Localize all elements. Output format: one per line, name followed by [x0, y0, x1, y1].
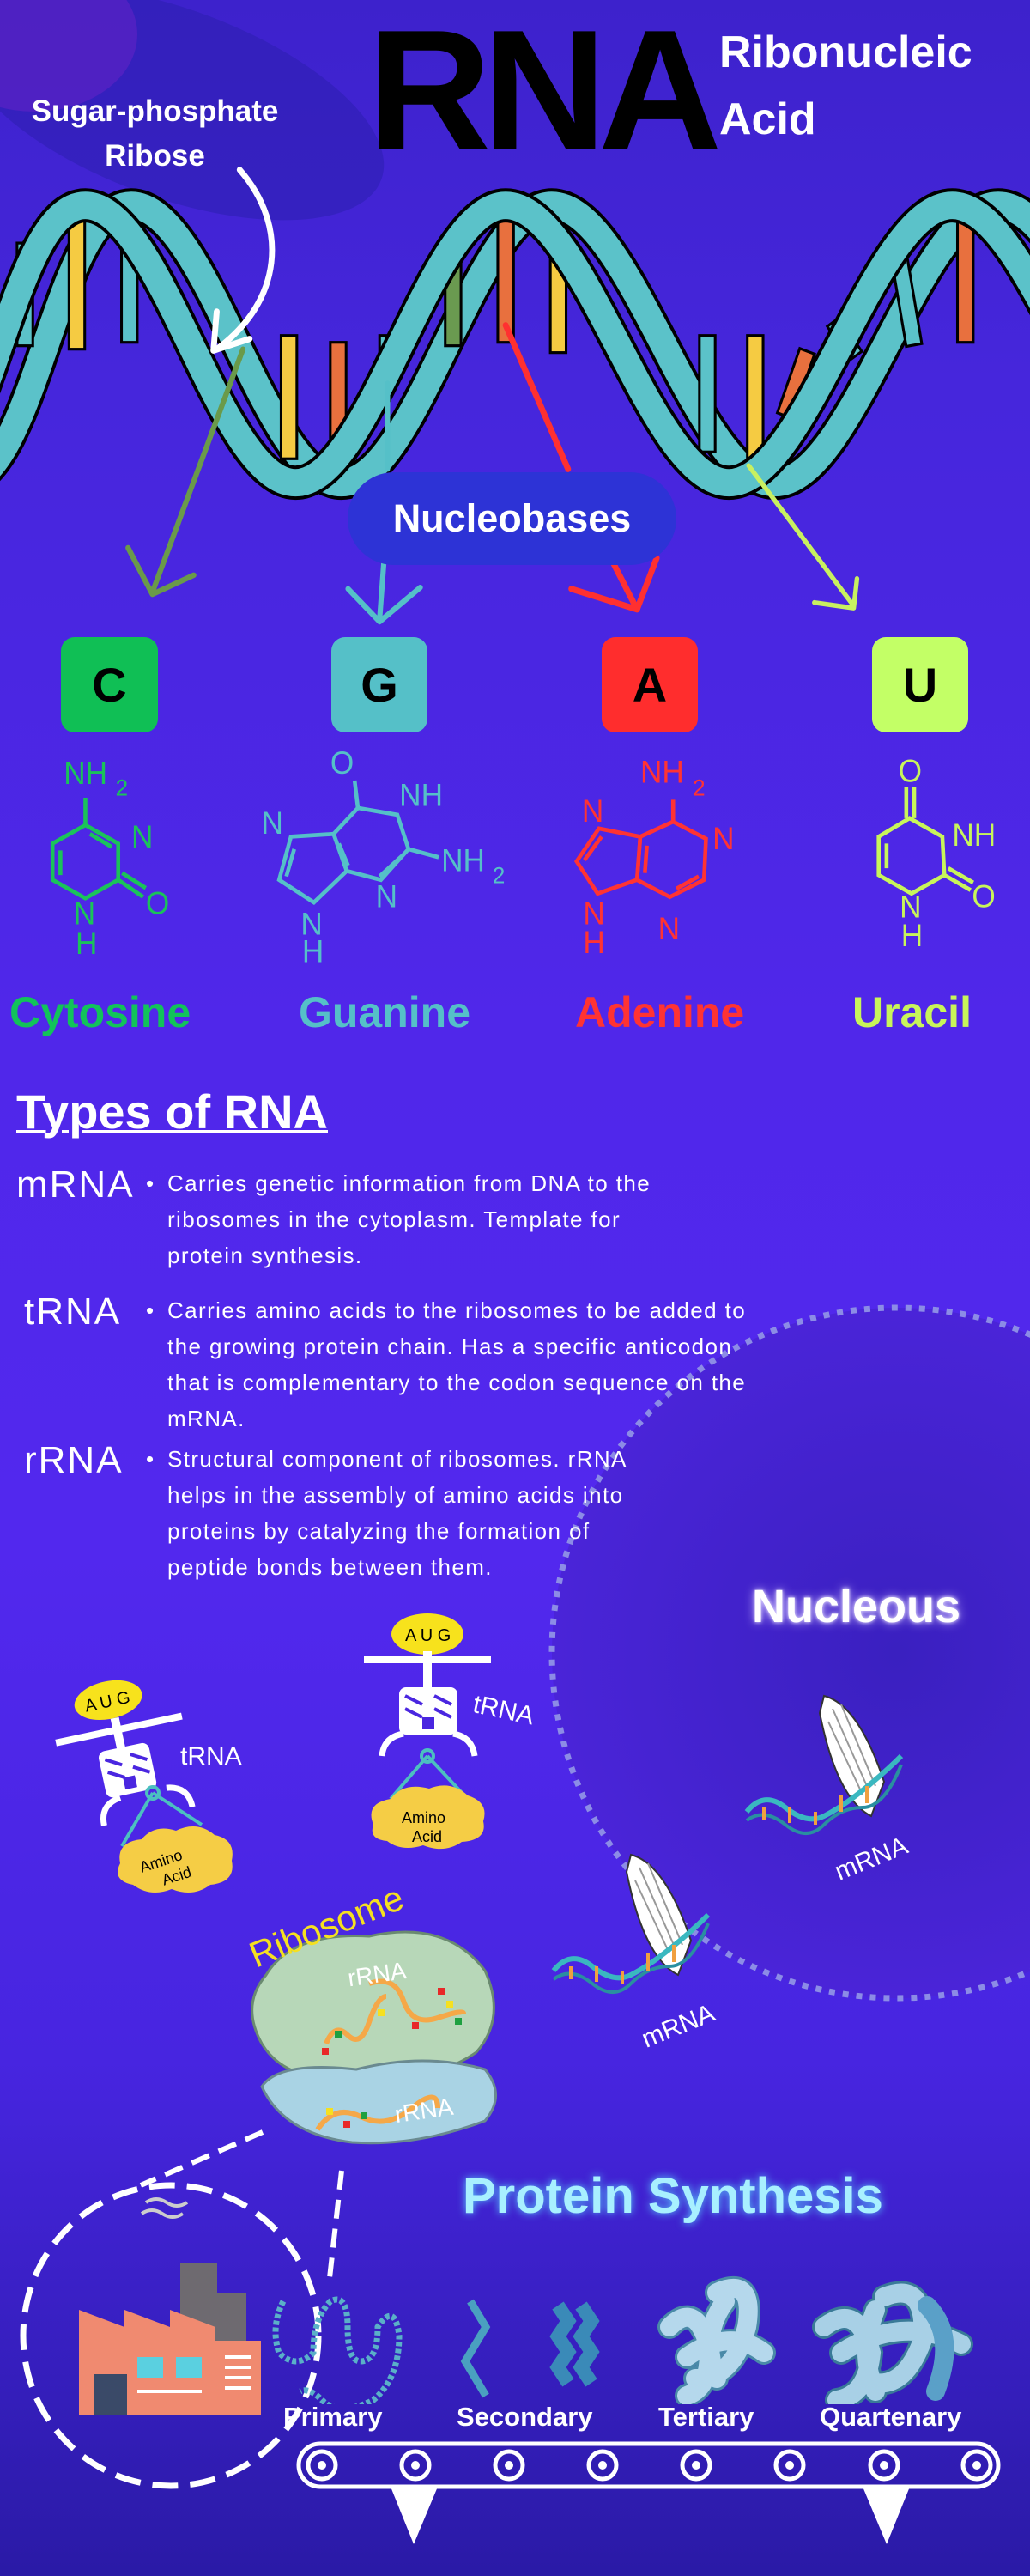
- block: tRNA: the growing protein chain. Has a specific anticodon: [167, 1334, 732, 1359]
- base names: [9, 988, 972, 1036]
- arrow: white sugar-phosphate: [214, 170, 272, 350]
- icon: tRNA helicopter 1: Acid: [160, 1863, 194, 1889]
- primary: [276, 2300, 399, 2409]
- factory callout: [21, 2129, 344, 2488]
- icon: tRNA helicopter 1: [55, 1680, 242, 1893]
- structure: guanine: 2: [493, 862, 505, 889]
- title: RNA: RNA: [367, 0, 713, 186]
- subtitle: Ribonucleic Acid: [719, 27, 972, 144]
- block: rRNA: proteins by catalyzing the formation of: [167, 1518, 591, 1544]
- back strand: [0, 205, 1030, 483]
- block: rRNA: rRNA: [24, 1439, 124, 1481]
- structure: adenine: N: [658, 910, 680, 946]
- icon: factory: [79, 2199, 261, 2415]
- block: tRNA: mRNA.: [167, 1406, 245, 1431]
- secondary helix: [465, 2301, 486, 2396]
- structure: guanine: N: [300, 906, 323, 942]
- structure: adenine: N: [712, 820, 735, 856]
- block: rRNA: helps in the assembly of amino acids into: [167, 1482, 623, 1508]
- structure: adenine: H: [583, 924, 605, 960]
- icon: mRNA with wings 2: [551, 1853, 718, 2054]
- background blob top-left: [0, 0, 384, 220]
- structure: cytosine: N: [131, 819, 153, 854]
- subtitle: Ribonucleic Acid: Ribonucleic: [719, 27, 972, 77]
- structure: adenine: N: [583, 896, 605, 932]
- label: Primary: Primary: [283, 2402, 382, 2432]
- arrow: yellow-green uracil: [748, 465, 857, 608]
- name: Adenine: Adenine: [575, 988, 744, 1036]
- structure: guanine: O: [330, 744, 354, 781]
- structure: uracil: H: [901, 917, 923, 953]
- box: C: [61, 637, 158, 732]
- icon: mRNA with wings 1: [745, 1695, 912, 1886]
- structure: cytosine: 2: [116, 775, 128, 801]
- icon: tRNA helicopter 1: A U G: [83, 1688, 132, 1716]
- box: U: [872, 637, 968, 732]
- label: Nucleous: Nucleous: [752, 1581, 960, 1632]
- box: G: [331, 637, 427, 732]
- name: Uracil: Uracil: [852, 988, 972, 1036]
- icon: tRNA helicopter 2: Amino: [402, 1809, 445, 1826]
- icon: tRNA helicopter 1: Amino: [137, 1846, 185, 1876]
- structure: uracil: N: [900, 889, 922, 925]
- name: Cytosine: Cytosine: [9, 988, 191, 1036]
- structure: cytosine: N: [74, 896, 95, 932]
- structure: guanine: [262, 744, 505, 969]
- structure: adenine: [577, 754, 735, 960]
- quaternary: [824, 2293, 961, 2400]
- heading: Protein Synthesis: Protein Synthesis: [463, 2168, 883, 2224]
- structure: uracil: NH: [952, 817, 996, 853]
- ribosome: rRNA: [393, 2093, 455, 2128]
- structure: cytosine: O: [146, 885, 169, 921]
- label: Secondary: Secondary: [457, 2402, 593, 2432]
- rungs: [17, 216, 973, 465]
- structure: uracil: O: [972, 878, 996, 914]
- pill: Nucleobases: [348, 472, 676, 565]
- pill: Nucleobases: Nucleobases: [393, 496, 631, 540]
- structure: uracil: [879, 753, 996, 953]
- structure: guanine: H: [302, 933, 324, 969]
- block: rRNA: •: [146, 1446, 155, 1472]
- secondary sheet: [558, 2306, 591, 2383]
- tertiary: [670, 2288, 764, 2396]
- box: A: [602, 637, 698, 732]
- box: A: A: [633, 658, 667, 712]
- name: Guanine: Guanine: [299, 988, 470, 1036]
- block: tRNA: Carries amino acids to the ribosomes to be added to: [167, 1297, 746, 1323]
- structure: cytosine: [52, 755, 169, 961]
- icon: mRNA with wings 1: mRNA: [831, 1832, 912, 1886]
- block: tRNA: •: [146, 1297, 155, 1323]
- block: tRNA: [24, 1291, 746, 1431]
- box: U: U: [903, 658, 937, 712]
- arrows from helix to bases: [125, 167, 860, 625]
- block: rRNA: Structural component of ribosomes. rRNA: [167, 1446, 627, 1472]
- structure: cytosine: H: [76, 925, 97, 961]
- structure: adenine: 2: [693, 775, 706, 801]
- large subunit: [252, 1932, 494, 2080]
- block: rRNA: peptide bonds between them.: [167, 1554, 493, 1580]
- block: mRNA: [16, 1163, 651, 1268]
- block: mRNA: •: [146, 1170, 155, 1196]
- structure: guanine: NH: [441, 842, 485, 878]
- heading: Types of RNA: Types of RNA: [16, 1084, 328, 1139]
- arrow: red adenine: [506, 325, 657, 610]
- icon: mRNA with wings 2: mRNA: [638, 1999, 718, 2054]
- ribosome: [244, 1877, 497, 2145]
- structure: adenine: NH: [640, 754, 684, 790]
- icon: tRNA helicopter 2: tRNA: [470, 1690, 536, 1730]
- block: rRNA: [24, 1439, 627, 1580]
- label: Sugar-phosphate Ribose: Sugar-phosphate: [32, 94, 278, 128]
- structure: guanine: NH: [399, 777, 443, 813]
- ribosome: rRNA: [346, 1957, 409, 1991]
- structure: uracil: O: [899, 753, 922, 789]
- protein structures: [273, 2275, 973, 2404]
- block: mRNA: ribosomes in the cytoplasm. Template for: [167, 1206, 621, 1232]
- label: Sugar-phosphate Ribose: [32, 94, 278, 173]
- block: mRNA: mRNA: [16, 1163, 135, 1206]
- structure: guanine: N: [262, 805, 283, 841]
- block: tRNA: that is complementary to the codon sequence on the: [167, 1370, 746, 1395]
- block: mRNA: Carries genetic information from DNA to the: [167, 1170, 651, 1196]
- icon: tRNA helicopter 2: Acid: [412, 1828, 442, 1845]
- subtitle: Ribonucleic Acid: Acid: [719, 94, 816, 144]
- protein labels: [283, 2402, 961, 2432]
- front strand: [0, 205, 1030, 483]
- small subunit: [262, 2061, 496, 2143]
- icon: tRNA helicopter 2: A U G: [405, 1626, 451, 1645]
- icon: tRNA helicopter 1: tRNA: [180, 1742, 242, 1771]
- label: Sugar-phosphate Ribose: Ribose: [105, 139, 205, 173]
- helix diagram: [0, 188, 1030, 500]
- conveyor belt: [297, 2442, 1001, 2544]
- block: mRNA: protein synthesis.: [167, 1242, 363, 1268]
- nucleus circle: [549, 1305, 1030, 2001]
- block: tRNA: tRNA: [24, 1291, 121, 1333]
- structure: guanine: N: [376, 878, 397, 914]
- label: Tertiary: Tertiary: [658, 2402, 754, 2432]
- arrow: teal guanine: [348, 384, 421, 622]
- structure: cytosine: NH: [64, 755, 107, 791]
- icon: tRNA helicopter 2: [364, 1613, 536, 1850]
- arrow: green cytosine: [128, 349, 243, 594]
- box: G: G: [360, 658, 398, 712]
- label: Ribosome: Ribosome: [244, 1877, 409, 1975]
- chemical structures: [50, 744, 996, 969]
- box: C: C: [92, 658, 127, 712]
- label: Quartenary: Quartenary: [820, 2402, 961, 2432]
- structure: adenine: N: [582, 793, 603, 829]
